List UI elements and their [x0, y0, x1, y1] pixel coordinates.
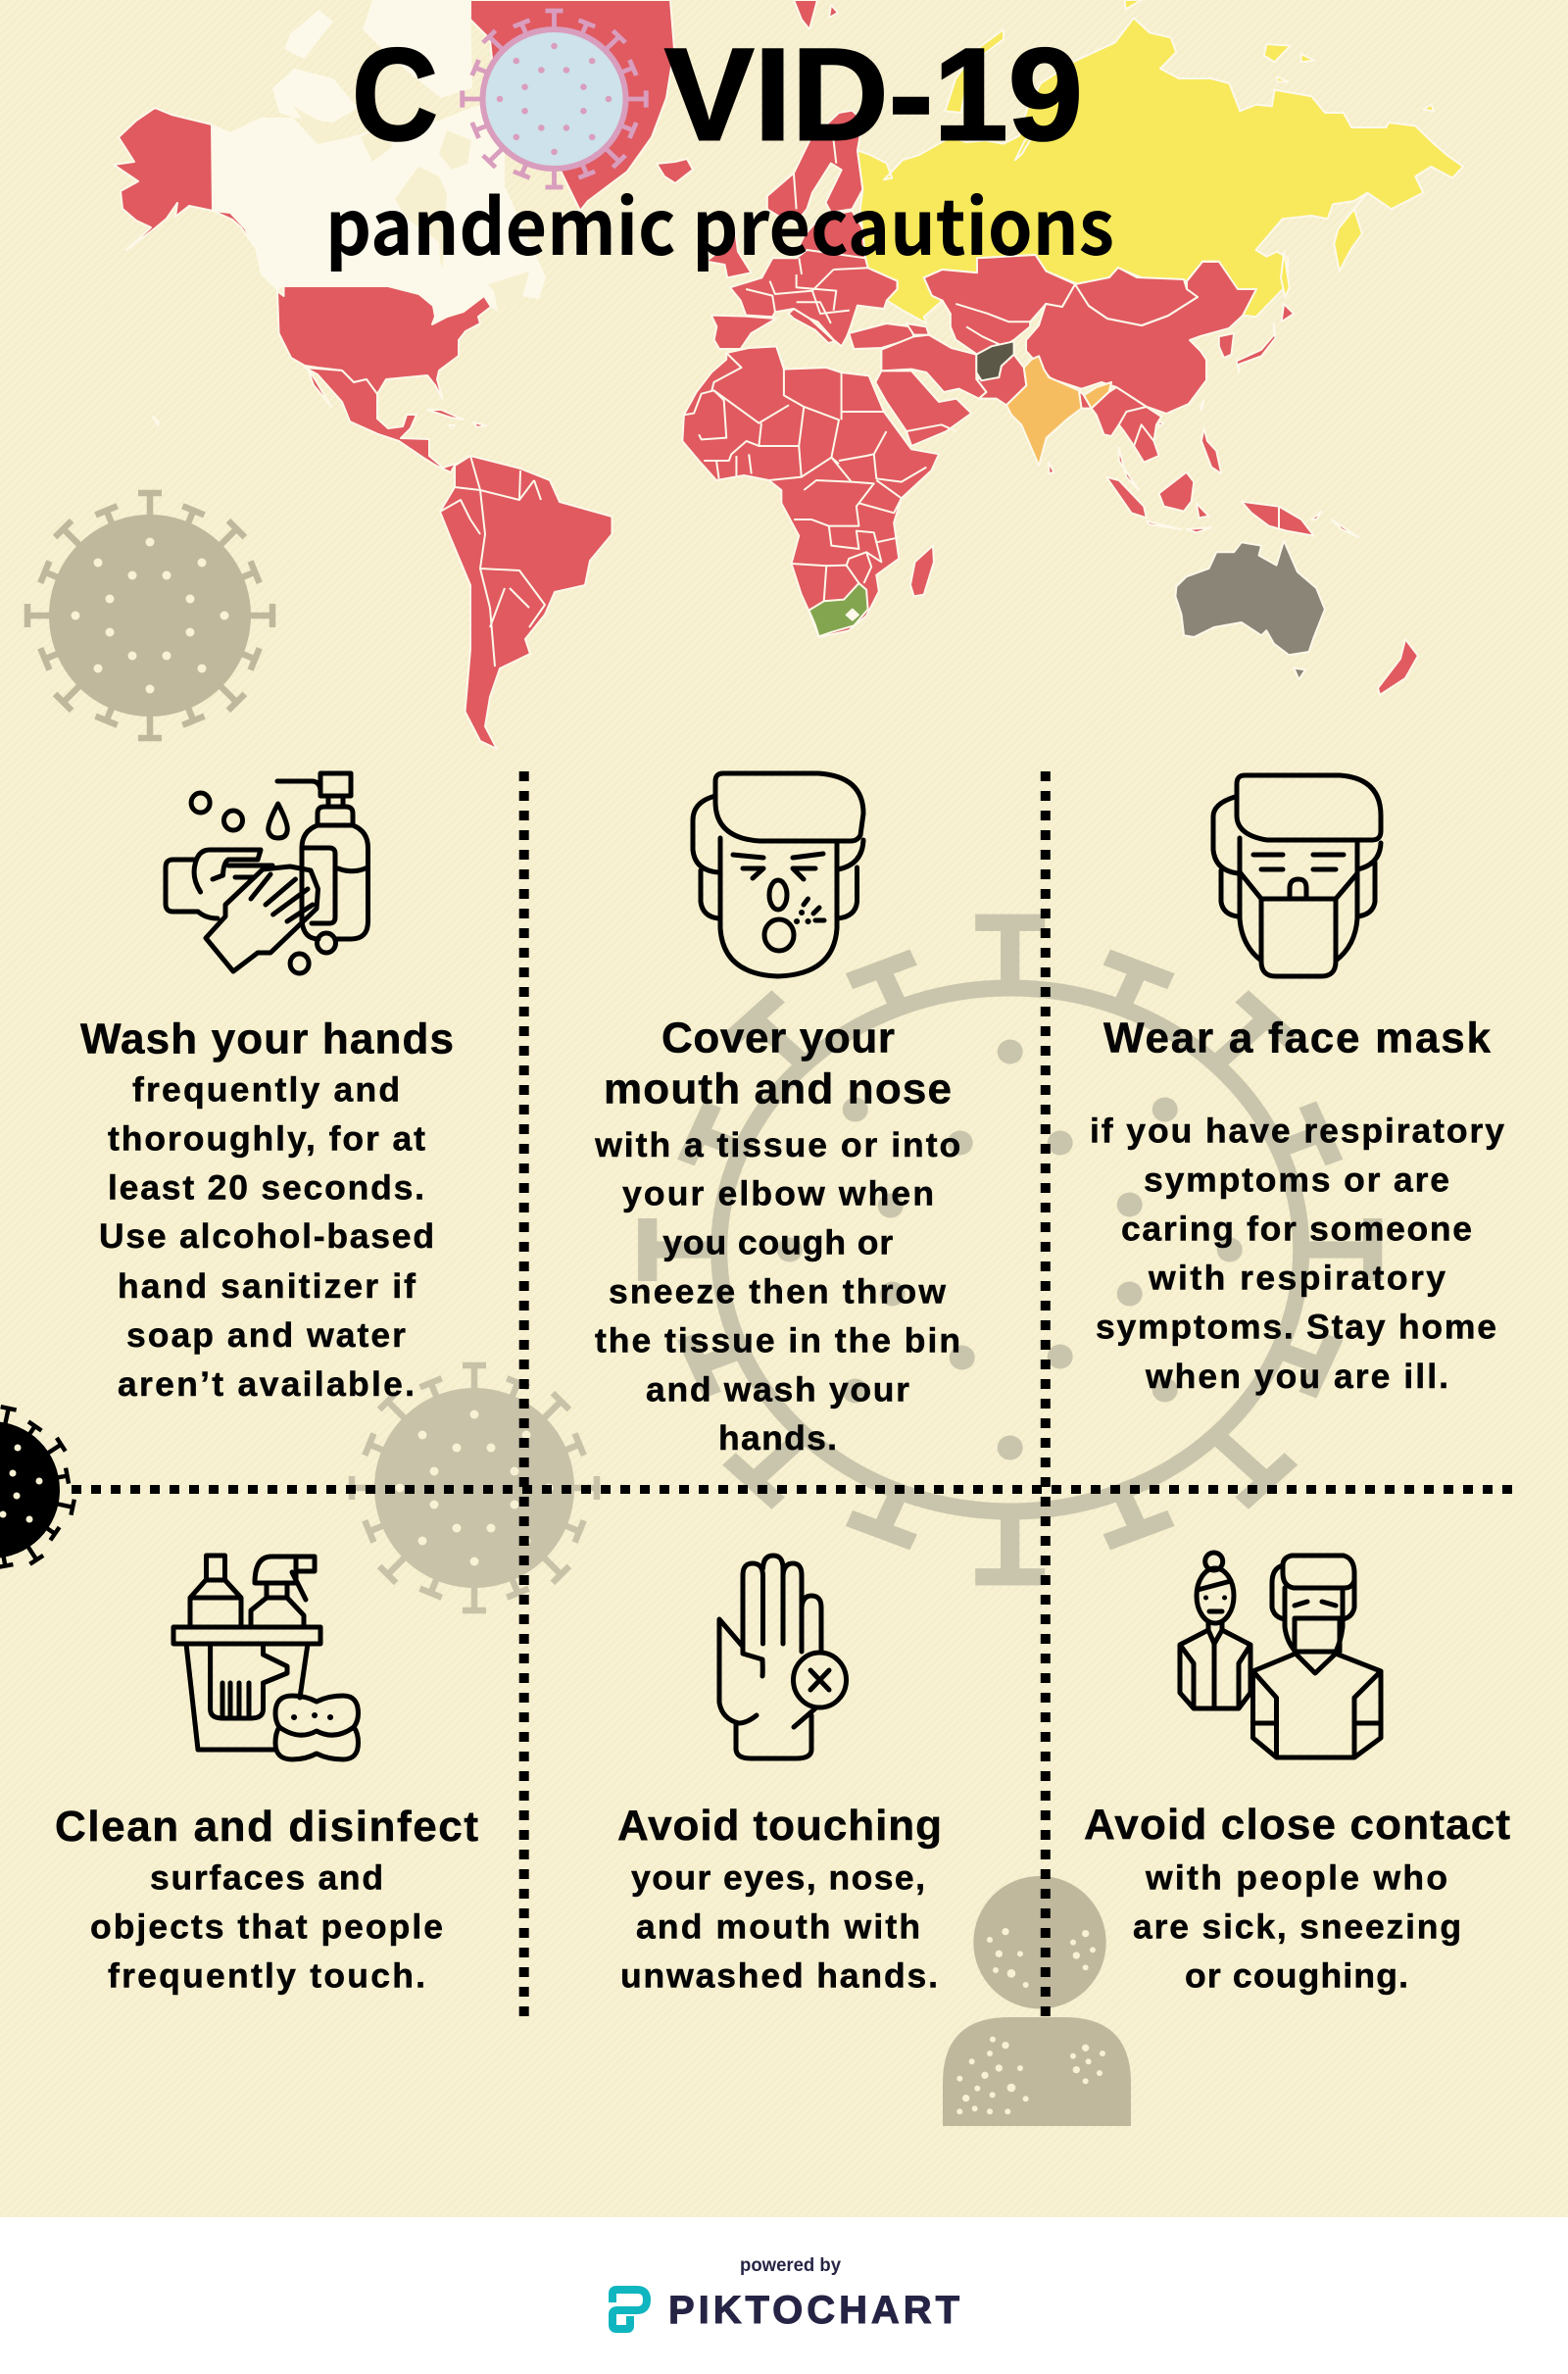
map: Hudson Bay and Canadian waters: [293, 105, 529, 311]
map: African borders: [684, 346, 926, 601]
clean body text: [90, 1858, 443, 1996]
title: COVID-19: C: [352, 22, 438, 169]
map: Madagascar: [910, 546, 934, 596]
map: China: [1026, 262, 1256, 414]
wash body text: soap and water: [126, 1315, 406, 1355]
map: Mexico and Central America: [305, 368, 456, 472]
large background virus: [648, 922, 1373, 1577]
map: USA: [277, 286, 491, 399]
block: cover mouth and nose: Cover your: [662, 1014, 895, 1063]
map: Southeast Asia: [1092, 387, 1359, 537]
contact body text: [1133, 1858, 1461, 1996]
wash body text: hand sanitizer if: [118, 1266, 416, 1306]
map: Mongolia: [1075, 268, 1198, 325]
virus spikes: [27, 493, 272, 738]
block: cover mouth and nose: mouth and nose: [604, 1064, 952, 1113]
block: avoid close contact: Avoid close contact: [1084, 1801, 1510, 1849]
mask body text: with respiratory: [1148, 1259, 1446, 1298]
tan person figure: [943, 1876, 1131, 2126]
wash body text: frequently and: [132, 1070, 400, 1110]
icon: face coughing: [693, 773, 863, 976]
map: Caribbean: [153, 410, 486, 428]
map: Arabian Peninsula: [875, 371, 971, 446]
block: wear a face mask: Wear a face mask: [1103, 1014, 1492, 1063]
map: Iran and Middle East: [881, 335, 987, 399]
map: Afghanistan: [976, 341, 1014, 380]
mask body text: when you are ill.: [1145, 1357, 1448, 1396]
clean body text: surfaces and: [150, 1858, 383, 1898]
map: Turkey: [849, 323, 914, 349]
cover body text: your elbow when: [622, 1174, 934, 1213]
map: Asia and Africa detail: [682, 304, 1359, 679]
title: COVID-19: [352, 11, 1083, 187]
wash body text: Use alcohol-based: [99, 1216, 434, 1256]
map: South Africa: [808, 583, 868, 636]
wash body text: aren’t available.: [118, 1364, 415, 1404]
map: Africa: [682, 346, 939, 637]
figure head: [973, 1876, 1106, 2008]
contact body text: or coughing.: [1185, 1956, 1408, 1996]
title: virus behind map-left: [27, 493, 272, 738]
subtitle: pandemic precautions: [325, 168, 1114, 277]
map: Central Asia: [924, 255, 1075, 355]
map: Lesotho: [847, 610, 858, 620]
clean body text: objects that people: [90, 1907, 443, 1947]
world map: [114, 0, 1463, 749]
cover body text: the tissue in the bin: [595, 1321, 960, 1360]
cover body text: and wash your: [646, 1370, 909, 1410]
middle tan virus: [352, 1365, 597, 1610]
map: Korea and Japan: [1219, 304, 1294, 372]
block: wash your hands: [80, 1015, 454, 1404]
map: Canada: [213, 0, 546, 324]
map: Pakistan: [976, 355, 1026, 405]
mask body text: symptoms or are: [1144, 1161, 1449, 1200]
map: Nepal and Bangladesh: [1049, 377, 1092, 409]
icon: cleaning bucket: [173, 1556, 359, 1759]
cover body text: [594, 1125, 960, 1458]
wash body text: least 20 seconds.: [108, 1168, 424, 1208]
map: New Zealand: [1378, 639, 1418, 695]
footer: PIKTOCHART: [668, 2289, 959, 2332]
cover body text: with a tissue or into: [594, 1125, 960, 1164]
map: Caucasus: [906, 323, 929, 335]
map: South America: [440, 456, 612, 749]
dotted grid: [72, 771, 1515, 2016]
black virus at left edge: [0, 1391, 90, 1589]
map: New Guinea: [1242, 502, 1314, 536]
icon: washing hands and soap: [166, 773, 368, 973]
mask body text: if you have respiratory: [1090, 1112, 1504, 1151]
icon: face with mask: [1213, 775, 1381, 976]
block: clean and disinfect: [55, 1803, 478, 1996]
touching body text: your eyes, nose,: [631, 1858, 925, 1898]
map: Sri Lanka: [1049, 463, 1054, 473]
map: Iceland: [657, 159, 693, 183]
icon: two people: [1180, 1553, 1381, 1757]
icon: hand with cross: [719, 1556, 847, 1758]
cover body text: you cough or: [662, 1223, 893, 1262]
mask body text: caring for someone: [1121, 1210, 1472, 1249]
touching body text: unwashed hands.: [620, 1956, 938, 1996]
cover body text: sneeze then throw: [609, 1272, 946, 1311]
title: COVID-19: VID-19: [664, 22, 1083, 169]
footer: powered by: [740, 2255, 841, 2276]
block: cover mouth and nose: [594, 1014, 960, 1458]
map: Svalbard: [794, 0, 838, 29]
mask body text: symptoms. Stay home: [1096, 1308, 1496, 1347]
map: Russian islands: [945, 0, 1434, 297]
map: Alaska: [114, 108, 213, 250]
contact body text: with people who: [1145, 1858, 1447, 1898]
clean body text: frequently touch.: [108, 1956, 425, 1996]
map: Alaska panhandle: [213, 211, 255, 247]
block: avoid touching: Avoid touching: [617, 1802, 942, 1850]
figure body: [943, 2017, 1131, 2126]
block: wash your hands: Wash your hands: [80, 1015, 454, 1063]
wash body text: thoroughly, for at: [108, 1119, 425, 1159]
virus ring: [719, 988, 1301, 1511]
wash body text: [99, 1070, 434, 1404]
map: Russia: [858, 0, 1463, 323]
map: Scandinavia: [767, 111, 862, 223]
block: avoid touching: [617, 1802, 942, 1996]
touching body text: and mouth with: [636, 1907, 920, 1947]
map: Australia: [1175, 541, 1325, 679]
block: wear a face mask: [1090, 1014, 1504, 1396]
map: Europe: [706, 211, 898, 349]
block: clean and disinfect: Clean and disinfect: [55, 1803, 478, 1851]
cover body text: hands.: [718, 1418, 837, 1458]
map: India: [1006, 356, 1111, 466]
map: Greenland: [470, 0, 674, 211]
title virus icon: [463, 11, 646, 187]
touching body text: [620, 1858, 938, 1996]
icon: Piktochart logo: [612, 2290, 647, 2329]
mask body text: [1090, 1112, 1504, 1396]
map: Baja California: [308, 369, 331, 407]
contact body text: are sick, sneezing: [1133, 1907, 1461, 1947]
block: avoid close contact: [1084, 1801, 1510, 1996]
footer: [0, 2217, 1568, 2374]
